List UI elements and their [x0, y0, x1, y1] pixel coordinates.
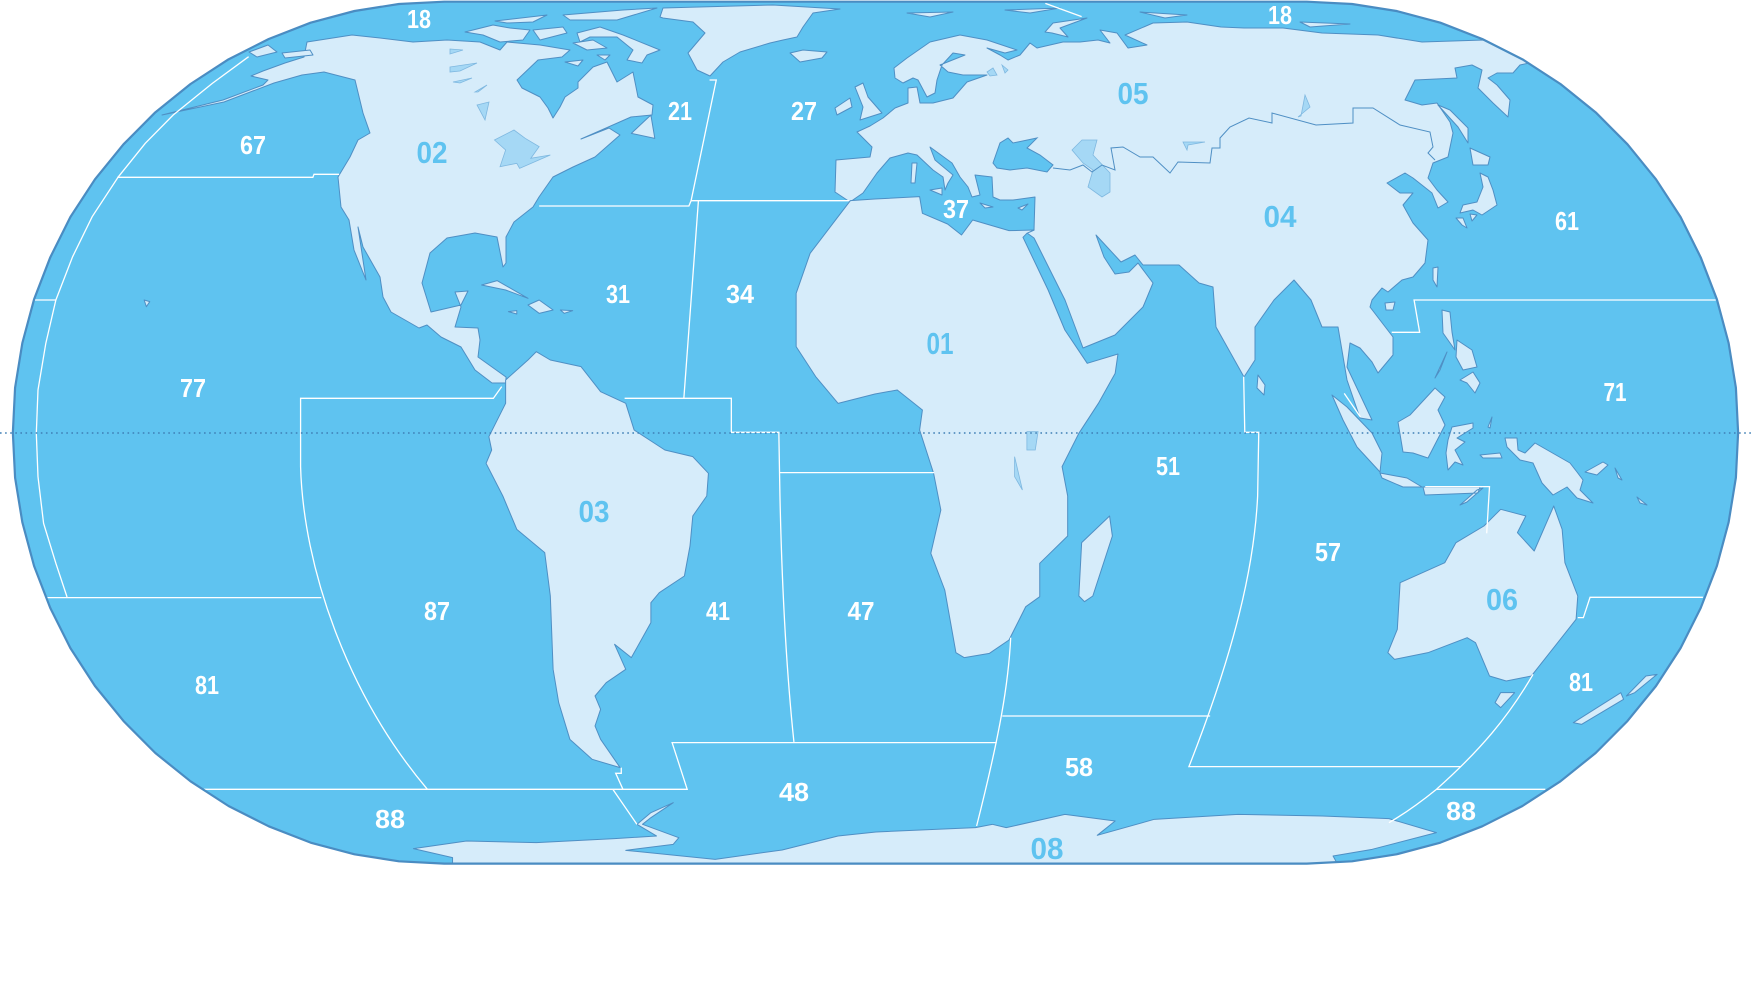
fishing area boundaries	[35, 3, 1716, 826]
South America	[486, 352, 708, 768]
ocean area numbers: 61	[1555, 206, 1579, 236]
land in true pixel coordinates	[144, 5, 1657, 866]
South America and other continents in map coordinates	[144, 115, 1657, 866]
Boundary of areas 61 and 71	[1392, 300, 1716, 332]
ocean area numbers: 81	[1569, 667, 1593, 697]
ocean area numbers: 51	[1156, 451, 1180, 481]
continent numbers: 06	[1486, 582, 1518, 617]
continent numbers: 05	[1118, 76, 1148, 111]
continent numbers: 08	[1030, 831, 1064, 866]
British Isles	[835, 83, 882, 120]
Boundary of areas 71 and 81	[1578, 597, 1703, 618]
ocean area numbers: 31	[606, 279, 630, 309]
ocean area numbers: 27	[791, 96, 817, 126]
continent numbers: 02	[416, 135, 448, 170]
Pacific western boundary	[36, 57, 249, 597]
Eurasia	[835, 22, 1529, 420]
continent numbers: 01	[926, 326, 954, 361]
Mediterranean islands	[911, 163, 1028, 210]
Sri Lanka	[1257, 375, 1265, 395]
Arctic Russian islands	[907, 8, 1350, 37]
Russia and Asia border	[1053, 108, 1435, 173]
Canadian Arctic islands	[465, 8, 660, 66]
Boundary of areas 51 and 57	[1189, 377, 1460, 767]
Caspian Sea	[1072, 140, 1110, 197]
Greenland	[660, 5, 840, 76]
Bering boundary	[1045, 3, 1082, 17]
ocean area numbers: 47	[848, 596, 874, 626]
North America	[162, 35, 653, 383]
Antarctica	[413, 803, 1436, 866]
Alaska islands	[249, 45, 313, 58]
Canadian lakes	[450, 49, 489, 120]
Black Sea	[993, 138, 1053, 172]
Baikal	[1298, 95, 1310, 117]
Drake Passage boundary	[613, 768, 637, 824]
continent numbers: 03	[578, 494, 610, 529]
Africa	[796, 197, 1118, 658]
ocean area numbers: 88	[1446, 796, 1476, 826]
ocean area numbers: 37	[943, 194, 969, 224]
ocean area numbers: 88	[375, 804, 405, 834]
Boundary of areas 21, 27, 31 and 34	[539, 80, 849, 398]
ocean area numbers: 34	[726, 279, 755, 309]
Boundary of areas 77 and 87	[301, 387, 502, 789]
ocean area numbers: 18	[407, 4, 431, 34]
equator dotted line	[0, 432, 1751, 434]
Australia	[1388, 506, 1578, 681]
ocean area numbers: 81	[195, 670, 219, 700]
ocean area numbers: 48	[779, 777, 809, 807]
ocean area numbers: 21	[668, 96, 692, 126]
Tasmania and New Zealand	[1495, 674, 1657, 724]
ocean area numbers: 18	[1268, 0, 1292, 30]
Boundary of areas 77 and 81	[47, 597, 321, 599]
Sumatra and Java	[1332, 395, 1483, 505]
lakes	[450, 49, 1310, 490]
Caribbean islands and Newfoundland	[144, 115, 655, 314]
ocean area numbers: 71	[1604, 377, 1626, 407]
Indonesian boundaries	[1344, 393, 1489, 533]
ocean area numbers: 87	[424, 596, 450, 626]
ocean area numbers: 58	[1065, 752, 1093, 782]
ocean area numbers: 77	[180, 373, 206, 403]
Borneo and Sulawesi	[1398, 388, 1492, 470]
Boundary of areas 34, 41 and 47	[625, 398, 794, 742]
Hainan and Philippines	[1385, 302, 1480, 393]
African lakes	[1015, 432, 1038, 490]
Iceland	[790, 50, 827, 62]
continent numbers: 04	[1264, 199, 1297, 234]
New Guinea and Melanesia	[1480, 438, 1647, 505]
ocean area numbers: 67	[240, 130, 266, 160]
Madagascar	[1079, 516, 1112, 602]
Boundary of areas 47, 51 and 58	[977, 638, 1011, 826]
ocean area numbers: 57	[1315, 537, 1341, 567]
Boundary of areas 57, 81 and 58	[1389, 674, 1533, 823]
Boundary of areas 81, 87, 88, 41 and 48	[204, 743, 997, 789]
Boundary of areas 67 and 77	[117, 174, 339, 177]
Great Lakes	[494, 130, 550, 168]
Sakhalin, Japan and Taiwan	[1433, 105, 1497, 287]
ocean area numbers: 41	[706, 596, 730, 626]
Ladoga, Onega and Aral	[987, 65, 1205, 150]
continent numbers	[416, 76, 1518, 866]
ocean area numbers	[180, 0, 1626, 834]
